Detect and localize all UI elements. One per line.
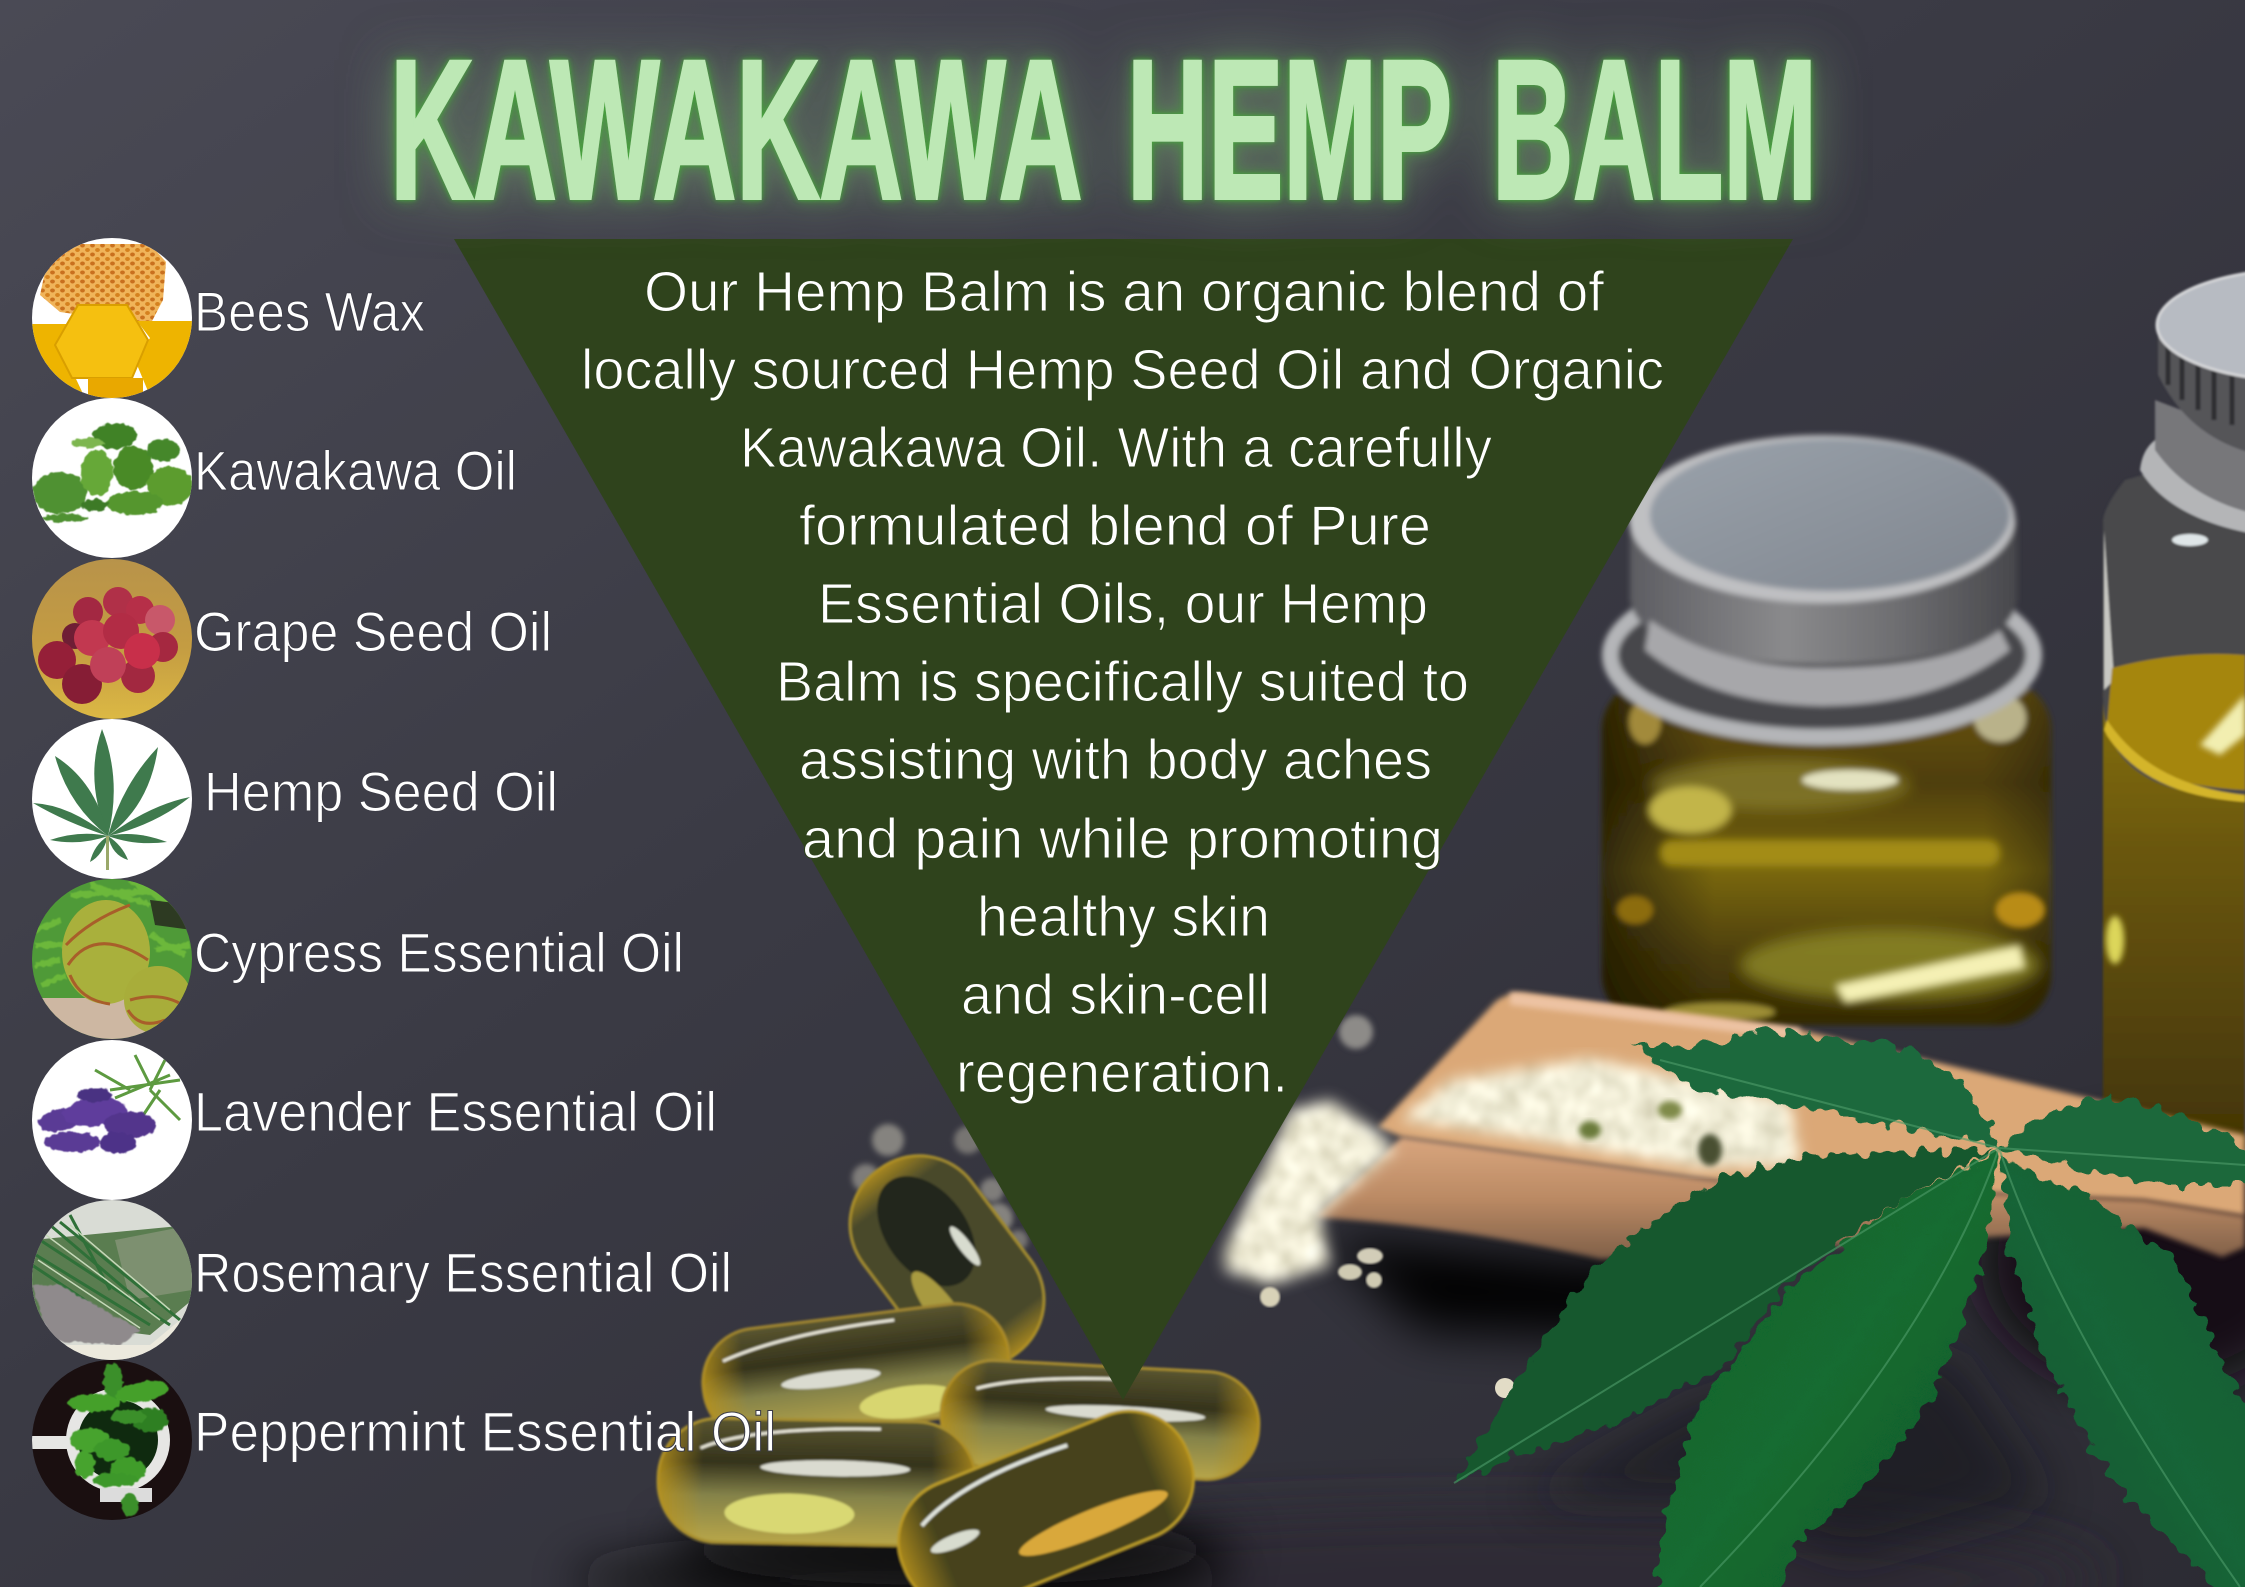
icon: cypress cone <box>32 878 192 1040</box>
text block: product description: Our Hemp Balm is an organic blend of <box>644 260 1604 324</box>
text block: product description: healthy skin <box>977 885 1270 949</box>
ingredient labels: Hemp Seed Oil <box>204 760 558 823</box>
panel: green inverted triangle <box>454 239 1793 1400</box>
ingredient labels: Grape Seed Oil <box>194 600 552 663</box>
photo: hemp leaf <box>1454 1030 2245 1587</box>
title: KAWAKAWA <box>390 19 1079 240</box>
text block: product description: and pain while promoting <box>802 807 1443 871</box>
text block: product description: locally sourced Hemp Seed Oil and Organic <box>581 338 1664 402</box>
title: BALM <box>1492 19 1817 240</box>
text block: product description: formulated blend of Pure <box>799 494 1431 558</box>
ingredient labels: Kawakawa Oil <box>194 439 517 502</box>
icon: grape seed <box>32 558 192 720</box>
icon: kawakawa leaves <box>32 398 193 558</box>
photo: softgel capsules <box>657 1129 1262 1587</box>
icon: peppermint <box>32 1358 192 1522</box>
leaf shadow <box>1520 1350 2050 1560</box>
ingredient labels: Rosemary Essential Oil <box>194 1241 732 1304</box>
ingredient labels <box>194 280 776 1463</box>
text block: product description <box>581 260 1664 1105</box>
text block: product description: and skin-cell <box>961 963 1270 1027</box>
photo: oil jar with silver lid <box>1602 435 2051 1025</box>
ingredient labels: Bees Wax <box>194 280 425 343</box>
text block: product description: regeneration. <box>956 1041 1288 1105</box>
text block: product description: assisting with body aches <box>799 728 1432 792</box>
text block: product description: Kawakawa Oil. With a carefully <box>740 416 1492 480</box>
leaf veins <box>1454 1060 2245 1587</box>
icon: hemp seed leaf <box>32 718 192 880</box>
text block: product description: Essential Oils, our Hemp <box>818 572 1428 636</box>
ingredient labels: Lavender Essential Oil <box>194 1080 717 1143</box>
title: HEMP <box>1127 19 1450 240</box>
photo: wooden scoop with hemp seeds <box>852 992 2245 1398</box>
icon: lavender <box>32 1038 192 1202</box>
text block: product description: Balm is specifically suited to <box>776 650 1469 714</box>
leaflets <box>1454 1030 2245 1587</box>
icon: rosemary <box>32 1198 192 1362</box>
ingredient labels: Cypress Essential Oil <box>194 921 684 984</box>
photo: oil bottle at right edge <box>2103 269 2245 1170</box>
icon: bees wax <box>32 238 197 398</box>
ingredient labels: Peppermint Essential Oil <box>194 1400 776 1463</box>
